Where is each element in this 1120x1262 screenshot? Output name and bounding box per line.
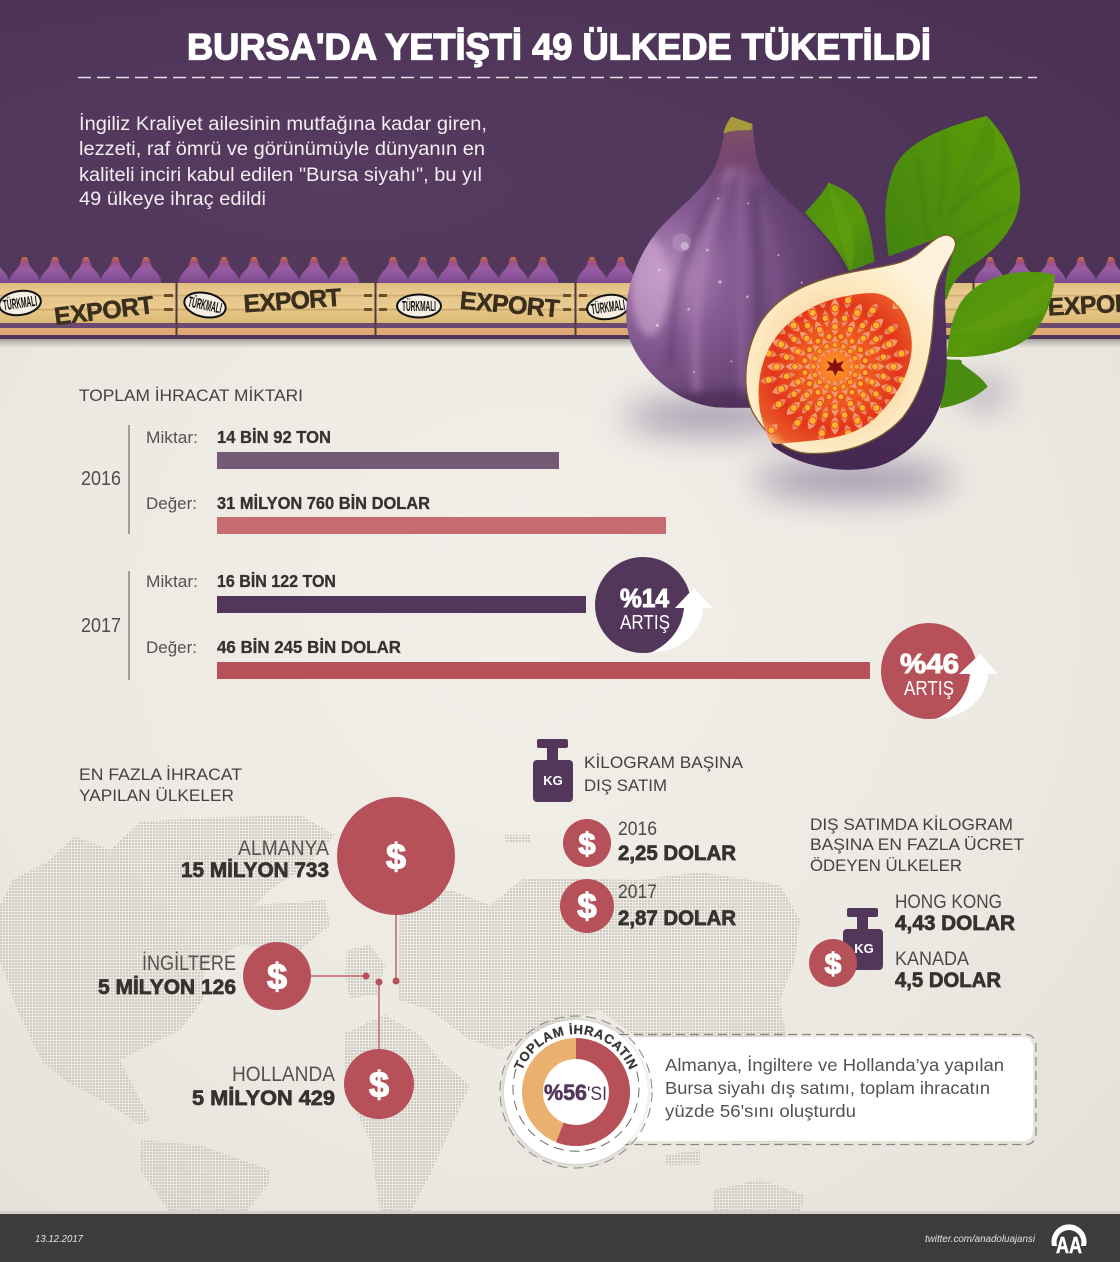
section heading: top export countries: EN FAZLA İHRACAT (79, 765, 242, 784)
crate label: export 3: EXPORT (459, 287, 561, 323)
price: Kanada: 4,5 DOLAR (895, 969, 1001, 992)
year label 2017: 2017 (81, 615, 121, 637)
chart: 2016 export bars: Değer: (146, 494, 197, 513)
icon: weight and dollar coin: KG (854, 941, 874, 956)
crate label: export 1: EXPORT (53, 291, 155, 331)
illustration: figs and leaves (623, 116, 1055, 498)
badge: 46 percent increase: %46 (900, 648, 959, 679)
badge: 46 percent increase (881, 623, 998, 719)
donut chart: 56 percent: 'SI (587, 1084, 607, 1105)
badge: 14 percent increase (595, 557, 713, 653)
title: BURSA'DA YETİŞTİ 49 ÜLKEDE TÜKETİLDİ (187, 26, 931, 68)
chart: 2016 export bars: 14 BİN 92 TON (217, 427, 331, 447)
export crates (0, 283, 1120, 348)
chart: 2016 export bars: Miktar: (146, 428, 198, 447)
section heading: top export countries (79, 765, 242, 805)
map connectors (300, 900, 400, 1060)
price 2016: 2,25 DOLAR (618, 842, 736, 865)
badge: 46 percent increase: ARTIŞ (904, 678, 954, 700)
callout: share of total exports: Almanya, İngiltere ve Hollanda’ya yapılan (665, 1055, 1004, 1075)
chart: 2017 export bars: Miktar: (146, 572, 198, 591)
badge: 14 percent increase: ARTIŞ (620, 612, 670, 634)
stamp: Türkmali 4 (586, 292, 630, 322)
intro paragraph: lezzeti, raf ömrü ve görünümüyle dünyanın en (79, 139, 485, 160)
price 2016 (563, 819, 736, 867)
chart: 2016 export bars (81, 425, 666, 534)
icon: kilogram weight (533, 739, 573, 802)
country: Hollanda: HOLLANDA (232, 1063, 335, 1086)
leaf: large upper (885, 116, 1020, 300)
country: Almanya (181, 797, 455, 915)
intro paragraph: 49 ülkeye ihraç edildi (79, 189, 266, 210)
stamp: Türkmali 2: TÜRKMALI (187, 294, 223, 317)
icon: weight and dollar coin (809, 908, 883, 987)
cut fig (736, 235, 955, 470)
country: İngiltere: $ (267, 956, 287, 997)
stamp: Türkmali 1 (0, 288, 42, 318)
donut chart: 56 percent: TOPLAM İHRACATIN (514, 1022, 638, 1070)
stamp: Türkmali 1: TÜRKMALI (2, 293, 38, 314)
footer bar (0, 1211, 1120, 1262)
country: Hollanda (192, 1049, 414, 1119)
donut chart: 56 percent (500, 1016, 652, 1168)
price: Hong Kong: 4,43 DOLAR (895, 912, 1015, 935)
price 2016: 2016 (618, 819, 657, 840)
icon: kilogram weight: KG (543, 773, 563, 788)
year label 2016: 2016 (81, 468, 121, 490)
price 2016: $ (578, 826, 596, 861)
section heading: top export countries: YAPILAN ÜLKELER (79, 786, 234, 805)
chart: 2017 export bars: 16 BİN 122 TON (217, 571, 336, 591)
price 2017 (560, 879, 736, 933)
leaf: small left (805, 183, 876, 273)
price 2017: $ (577, 887, 597, 926)
country: Almanya: 15 MİLYON 733 (181, 859, 329, 882)
intro paragraph: kaliteli inciri kabul edilen "Bursa siyahı", bu yıl (79, 165, 482, 186)
chart: 2017 export bars: 46 BİN 245 BİN DOLAR (217, 637, 401, 657)
Anadolu Agency logo (1052, 1224, 1086, 1258)
fig ground shadows (623, 382, 1007, 498)
country: Almanya: $ (386, 836, 406, 877)
stamp: Türkmali 2 (182, 289, 228, 321)
heading: export price per kg: KİLOGRAM BAŞINA (584, 753, 744, 772)
dotted world map (0, 815, 840, 1213)
heading: highest paying countries (810, 815, 1024, 875)
heading: export price per kg (584, 753, 744, 795)
country: İngiltere: 5 MİLYON 126 (98, 976, 236, 999)
country: Almanya: ALMANYA (238, 837, 329, 860)
stamp: Türkmali 3 (397, 294, 441, 318)
chart: 2017 export bars (81, 571, 870, 680)
price: Hong Kong: HONG KONG (895, 892, 1002, 913)
price: Hong Kong (895, 892, 1015, 935)
price: Kanada: KANADA (895, 949, 969, 970)
stamp: Türkmali 4: TÜRKMALI (590, 297, 626, 318)
Anadolu Agency logo: AA (1056, 1232, 1082, 1258)
heading: highest paying countries: ÖDEYEN ÜLKELER (810, 856, 962, 875)
country: İngiltere: İNGİLTERE (142, 952, 236, 975)
heading: highest paying countries: BAŞINA EN FAZLA ÜCRET (810, 835, 1024, 854)
leaf: right (947, 272, 1055, 357)
intro paragraph (79, 114, 487, 210)
leaf: lower (940, 358, 988, 408)
price 2017: 2017 (618, 882, 657, 903)
export crates: TÜRKMALI (402, 298, 436, 315)
callout: share of total exports: yüzde 56'sını oluşturdu (665, 1101, 856, 1121)
fig pulp seeds (758, 295, 912, 440)
chart: 2017 export bars: Değer: (146, 638, 197, 657)
section heading: total exports: TOPLAM İHRACAT MİKTARI (79, 386, 303, 405)
country: Hollanda: $ (369, 1064, 389, 1105)
callout: share of total exports (610, 1034, 1036, 1144)
crate label: export 2: EXPORT (243, 284, 342, 318)
row of small figs above crates (0, 257, 1120, 283)
chart: 2016 export bars: 31 MİLYON 760 BİN DOLAR (217, 493, 430, 513)
country: İngiltere (98, 942, 311, 1010)
footer date: 13.12.2017 (35, 1234, 83, 1245)
callout: share of total exports: Bursa siyahı dış satımı, toplam ihracatın (665, 1078, 990, 1098)
footer social handle: twitter.com/anadoluajansi (925, 1233, 1036, 1245)
whole fig (626, 117, 850, 423)
badge: 14 percent increase: %14 (620, 583, 670, 613)
heading: highest paying countries: DIŞ SATIMDA KİLOGRAM (810, 815, 1013, 834)
header band (0, 0, 1120, 340)
country: Hollanda: 5 MİLYON 429 (192, 1087, 335, 1110)
heading: export price per kg: DIŞ SATIM (584, 776, 667, 795)
intro paragraph: İngiliz Kraliyet ailesinin mutfağına kadar giren, (79, 114, 487, 135)
price: Kanada (895, 949, 1001, 992)
price 2017: 2,87 DOLAR (618, 907, 736, 930)
donut chart: 56 percent: %56 (544, 1080, 587, 1105)
icon: weight and dollar coin: $ (825, 948, 842, 981)
